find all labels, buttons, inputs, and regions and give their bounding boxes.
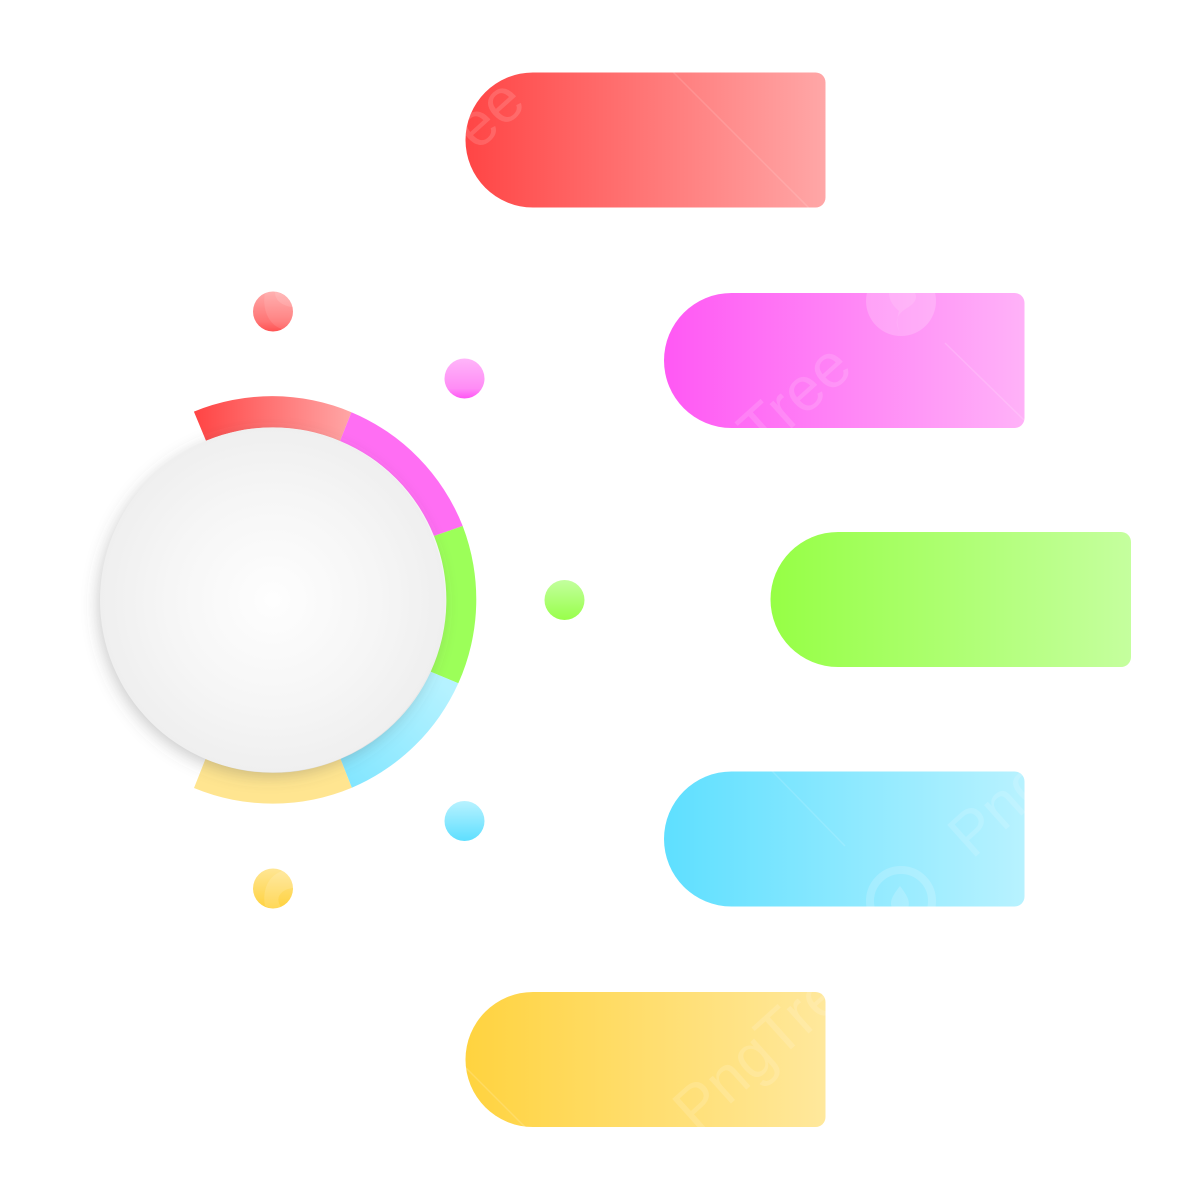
- ring segment: red: [194, 396, 351, 441]
- dot: red: [253, 291, 293, 332]
- dot: magenta: [444, 358, 484, 398]
- central disc shadow: [98, 434, 440, 776]
- donut ring with five segments: [194, 396, 476, 804]
- ring segment: blue: [340, 672, 458, 788]
- panel: red label pill: ee: [440, 65, 538, 162]
- dot: blue: [444, 801, 484, 841]
- panel: magenta label pill: [664, 293, 1024, 428]
- panel: magenta label pill: Tree: [725, 330, 864, 465]
- panel: blue label pill: Png: [935, 745, 1063, 870]
- dot: yellow: [253, 868, 293, 908]
- panel: green label pill: [770, 532, 1131, 667]
- ring segment: green: [431, 526, 476, 683]
- ring segment: magenta: [340, 412, 463, 536]
- dot: green: [544, 580, 584, 620]
- panel: red label pill: [466, 72, 826, 208]
- central disc: [100, 428, 445, 772]
- panel: yellow label pill: [466, 992, 826, 1127]
- ring segment: yellow: [194, 759, 352, 804]
- panel: yellow label pill: PngTree: [660, 936, 881, 1144]
- panel: blue label pill: [664, 772, 1024, 906]
